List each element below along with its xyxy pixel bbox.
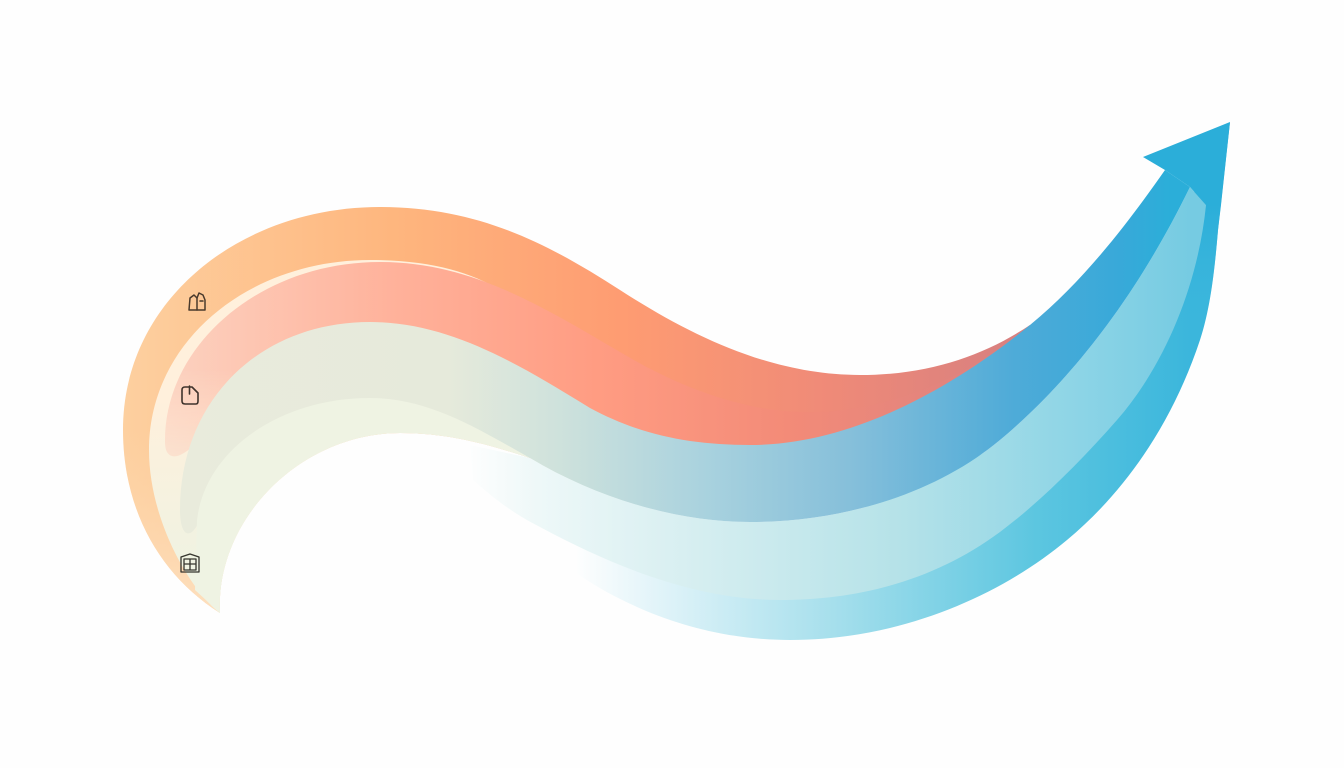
band: salmon ribbon <box>165 262 1030 456</box>
icon: grid building <box>181 554 199 572</box>
band: pale ribbon fading in <box>470 187 1206 600</box>
band: sage to blue ribbon <box>180 170 1190 533</box>
band: outer blue ribbon <box>540 122 1230 640</box>
arrow head <box>1143 122 1230 205</box>
icon: book <box>189 293 205 310</box>
band: cream highlight ribbon <box>149 260 530 613</box>
flowing arrow infographic <box>123 122 1230 640</box>
band: orange outer ribbon <box>123 207 1030 613</box>
band: pale green inner ribbon <box>195 398 530 613</box>
icon: document <box>182 386 198 404</box>
